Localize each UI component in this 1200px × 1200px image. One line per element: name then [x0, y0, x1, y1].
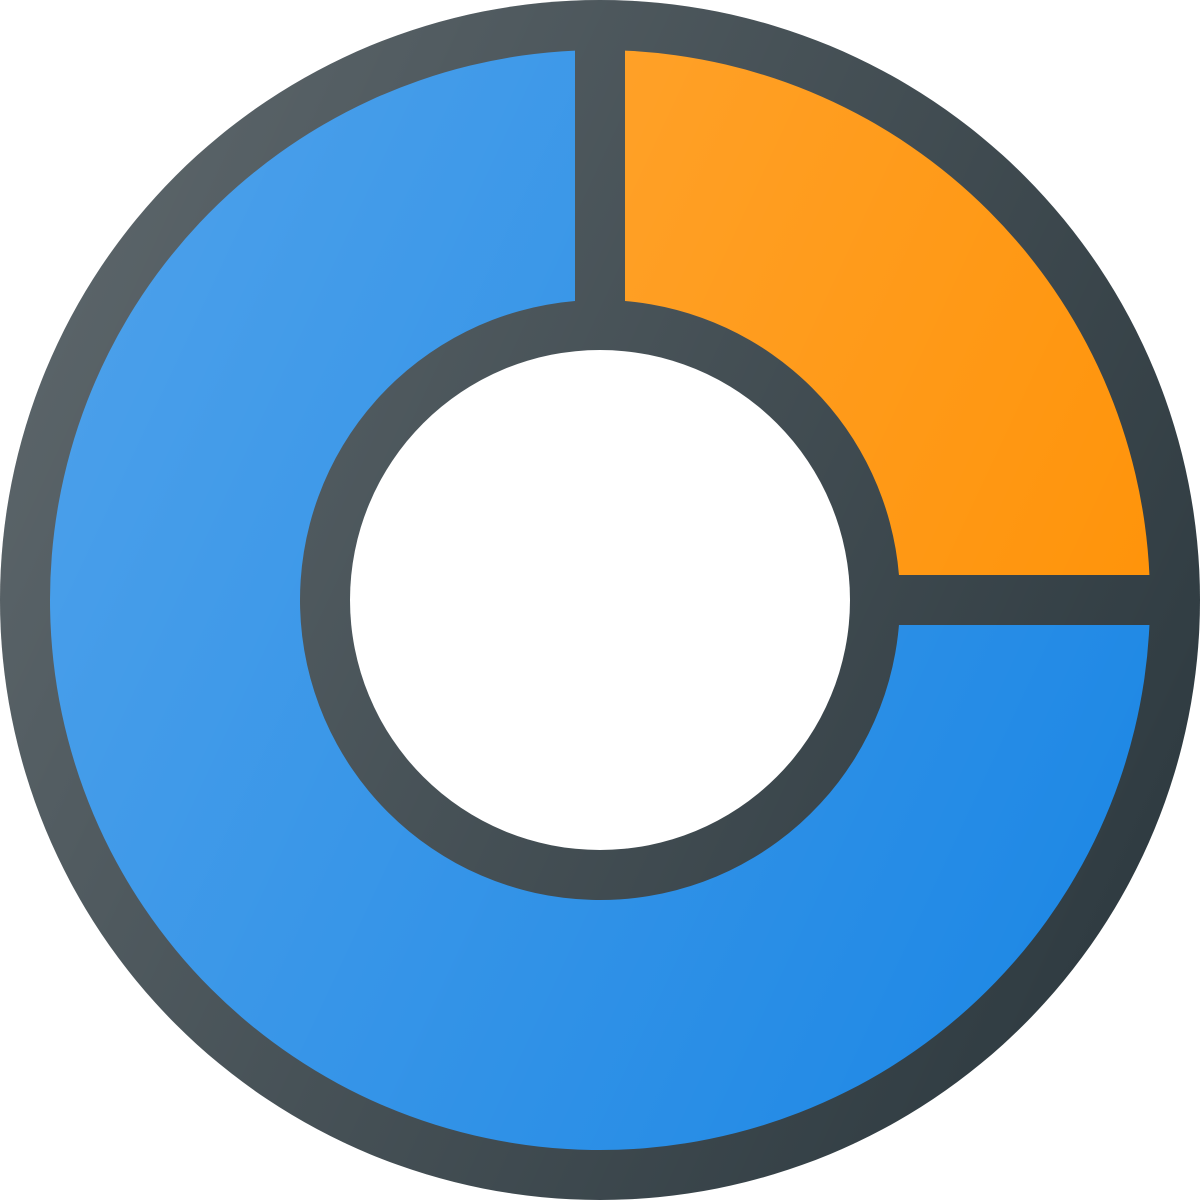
orange segment: 25%: [625, 51, 1149, 575]
white center hole: [350, 350, 850, 850]
